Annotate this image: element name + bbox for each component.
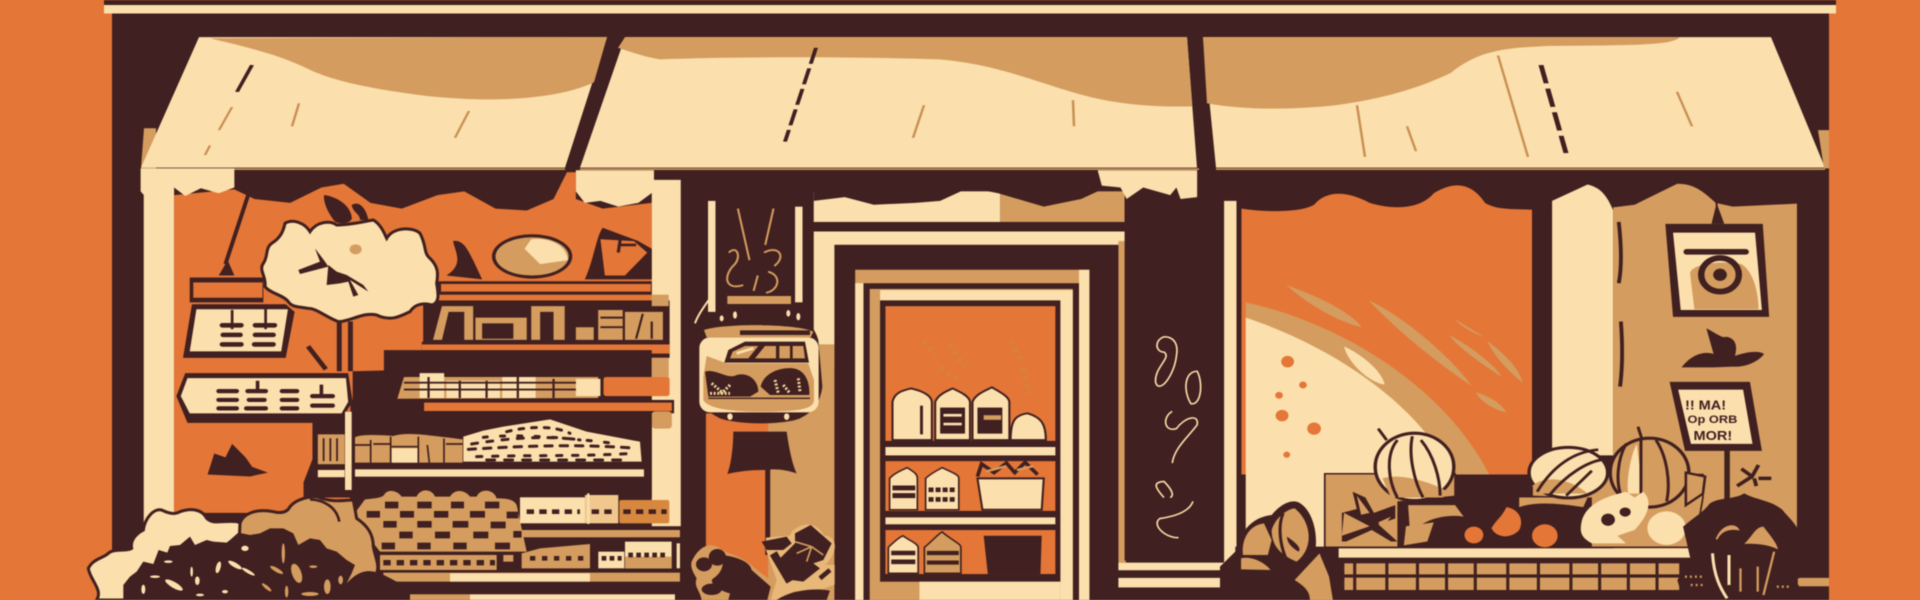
left cream pillar bbox=[144, 180, 174, 524]
cream shelf board bbox=[355, 469, 644, 477]
tan wall strip bbox=[706, 344, 834, 600]
tan side panel bbox=[1613, 184, 1797, 600]
tan stub bbox=[1798, 578, 1820, 585]
planter bushes bbox=[88, 497, 410, 600]
small bush icon bbox=[208, 444, 268, 476]
curtain scallop: left bbox=[141, 168, 234, 199]
support post bbox=[345, 412, 352, 490]
picture hook bbox=[1711, 178, 1724, 224]
door shelf: top bay bbox=[885, 306, 1055, 441]
door inner panel bbox=[870, 289, 1073, 600]
crate back bbox=[1325, 474, 1703, 547]
hill highlight bbox=[1344, 346, 1385, 385]
lantern cap bbox=[727, 296, 791, 304]
flower: left bbox=[691, 545, 775, 600]
baked trays bbox=[520, 493, 669, 524]
roof bar bbox=[104, 0, 1836, 14]
crate lattice bbox=[1344, 562, 1679, 592]
door shelf: bottom bay bbox=[885, 530, 1055, 574]
cream flecks bbox=[141, 546, 255, 596]
cream panel above door bbox=[814, 191, 1000, 222]
tassel cord bbox=[765, 467, 770, 555]
right cream pillar bbox=[652, 180, 681, 526]
dark slot with lantern ties bbox=[708, 201, 803, 312]
small sprig bbox=[1737, 465, 1771, 486]
top shelf produce bbox=[446, 228, 652, 279]
pumpkin middle bbox=[1529, 447, 1608, 498]
big cream flower bbox=[262, 195, 438, 322]
shelf 1 bbox=[437, 281, 652, 295]
price board: Op ORB bbox=[1688, 413, 1738, 426]
crate base and plants bbox=[1220, 493, 1820, 600]
door shelf: middle bay bbox=[885, 461, 1055, 511]
nut plant bbox=[1220, 501, 1335, 600]
cream pillar bbox=[1552, 184, 1613, 455]
flower stems bbox=[308, 321, 350, 371]
price board bbox=[1670, 382, 1762, 505]
hanging rod bbox=[225, 176, 254, 264]
crate ledge bbox=[1339, 548, 1695, 558]
awnings bbox=[141, 37, 1829, 169]
framed picture bbox=[1665, 224, 1769, 317]
price board: !! MA! bbox=[1685, 398, 1726, 412]
shelf 3 pastries bbox=[397, 373, 670, 399]
checker tray bbox=[357, 490, 527, 552]
door outer frame bbox=[834, 245, 1118, 600]
right shop window bbox=[1241, 178, 1829, 600]
panel cracks bbox=[1619, 222, 1622, 387]
leaf icon bbox=[1682, 328, 1764, 367]
lower shelves bbox=[345, 412, 680, 600]
awning: left bbox=[141, 37, 645, 169]
lower dark counter bbox=[350, 412, 680, 600]
awning: right bbox=[1203, 37, 1829, 169]
tan panel above door bbox=[1000, 191, 1125, 222]
lantern tan scene bbox=[703, 356, 814, 412]
centre section bbox=[706, 170, 1255, 600]
orange fruits bbox=[1465, 507, 1558, 547]
dark post behind window bbox=[1237, 180, 1255, 600]
lower shelf backing bbox=[304, 411, 652, 498]
crate cavity bbox=[1397, 496, 1592, 547]
hill tan band bbox=[1246, 302, 1489, 475]
lantern tassel bbox=[727, 432, 797, 474]
curtain scallop: right bbox=[576, 170, 654, 207]
pumpkin left bbox=[1375, 429, 1454, 501]
hill dots bbox=[1275, 356, 1321, 458]
cream gourds bbox=[1581, 492, 1686, 545]
lantern trees bbox=[705, 368, 810, 398]
tan flecks bbox=[261, 543, 343, 598]
cream scallop on post bbox=[1098, 170, 1197, 199]
flowers beside door bbox=[691, 524, 835, 600]
grain pile bbox=[463, 419, 642, 462]
pumpkin right bbox=[1610, 427, 1705, 507]
price sign bbox=[176, 373, 353, 423]
dark base bbox=[1220, 547, 1794, 600]
bracket shape above sign bbox=[190, 260, 263, 302]
bottom shelf board bbox=[383, 573, 680, 600]
orange window with wavy curtain edge bbox=[174, 172, 652, 513]
left shop window bbox=[141, 168, 681, 526]
lantern upper band bbox=[704, 325, 813, 337]
shelf 2 books bbox=[423, 295, 670, 344]
lantern beads bbox=[720, 310, 800, 420]
bush: cream bbox=[88, 510, 267, 600]
right dark plant bbox=[1677, 493, 1802, 600]
shelf 3 board bbox=[350, 400, 674, 429]
door shelf boards bbox=[885, 447, 1055, 524]
orange window bbox=[1241, 185, 1532, 475]
orange wall bbox=[706, 413, 768, 600]
price board: MOR! bbox=[1694, 429, 1732, 443]
foliage mass bbox=[123, 528, 410, 600]
streaks bbox=[1286, 285, 1523, 413]
lantern body bbox=[698, 313, 822, 423]
lantern glass bbox=[699, 337, 819, 412]
tan shelf board bbox=[522, 530, 680, 537]
crate leaves bbox=[1342, 492, 1434, 545]
shelf 3 backing bbox=[353, 350, 652, 406]
jars row three bbox=[888, 532, 1042, 574]
flower: right bbox=[762, 524, 835, 600]
curtain edge bbox=[814, 170, 1125, 207]
jars row one bbox=[892, 387, 1046, 440]
hanging sign bbox=[183, 304, 295, 358]
tan strip beside post bbox=[1118, 241, 1126, 563]
packaged goods bbox=[355, 434, 463, 463]
small tray bbox=[598, 542, 680, 568]
awning: centre bbox=[580, 37, 1199, 169]
door cream frame bbox=[814, 232, 1127, 367]
jars row two and pot bbox=[890, 462, 1044, 510]
tray band under checkers bbox=[380, 544, 590, 570]
hanging lantern bbox=[695, 296, 822, 474]
pillar chalk panel bbox=[1118, 199, 1237, 587]
door inner tan frame bbox=[855, 270, 1089, 600]
shelf 2 board bbox=[422, 342, 670, 358]
right ledge stub bbox=[1797, 578, 1829, 586]
bush: tan bbox=[237, 497, 378, 600]
hill cream bbox=[1246, 318, 1455, 555]
lantern building bbox=[724, 342, 809, 363]
goods left of post bbox=[318, 434, 345, 477]
crate rims bbox=[1408, 498, 1588, 536]
bush crease bbox=[310, 499, 339, 522]
lantern neck bbox=[695, 298, 710, 323]
